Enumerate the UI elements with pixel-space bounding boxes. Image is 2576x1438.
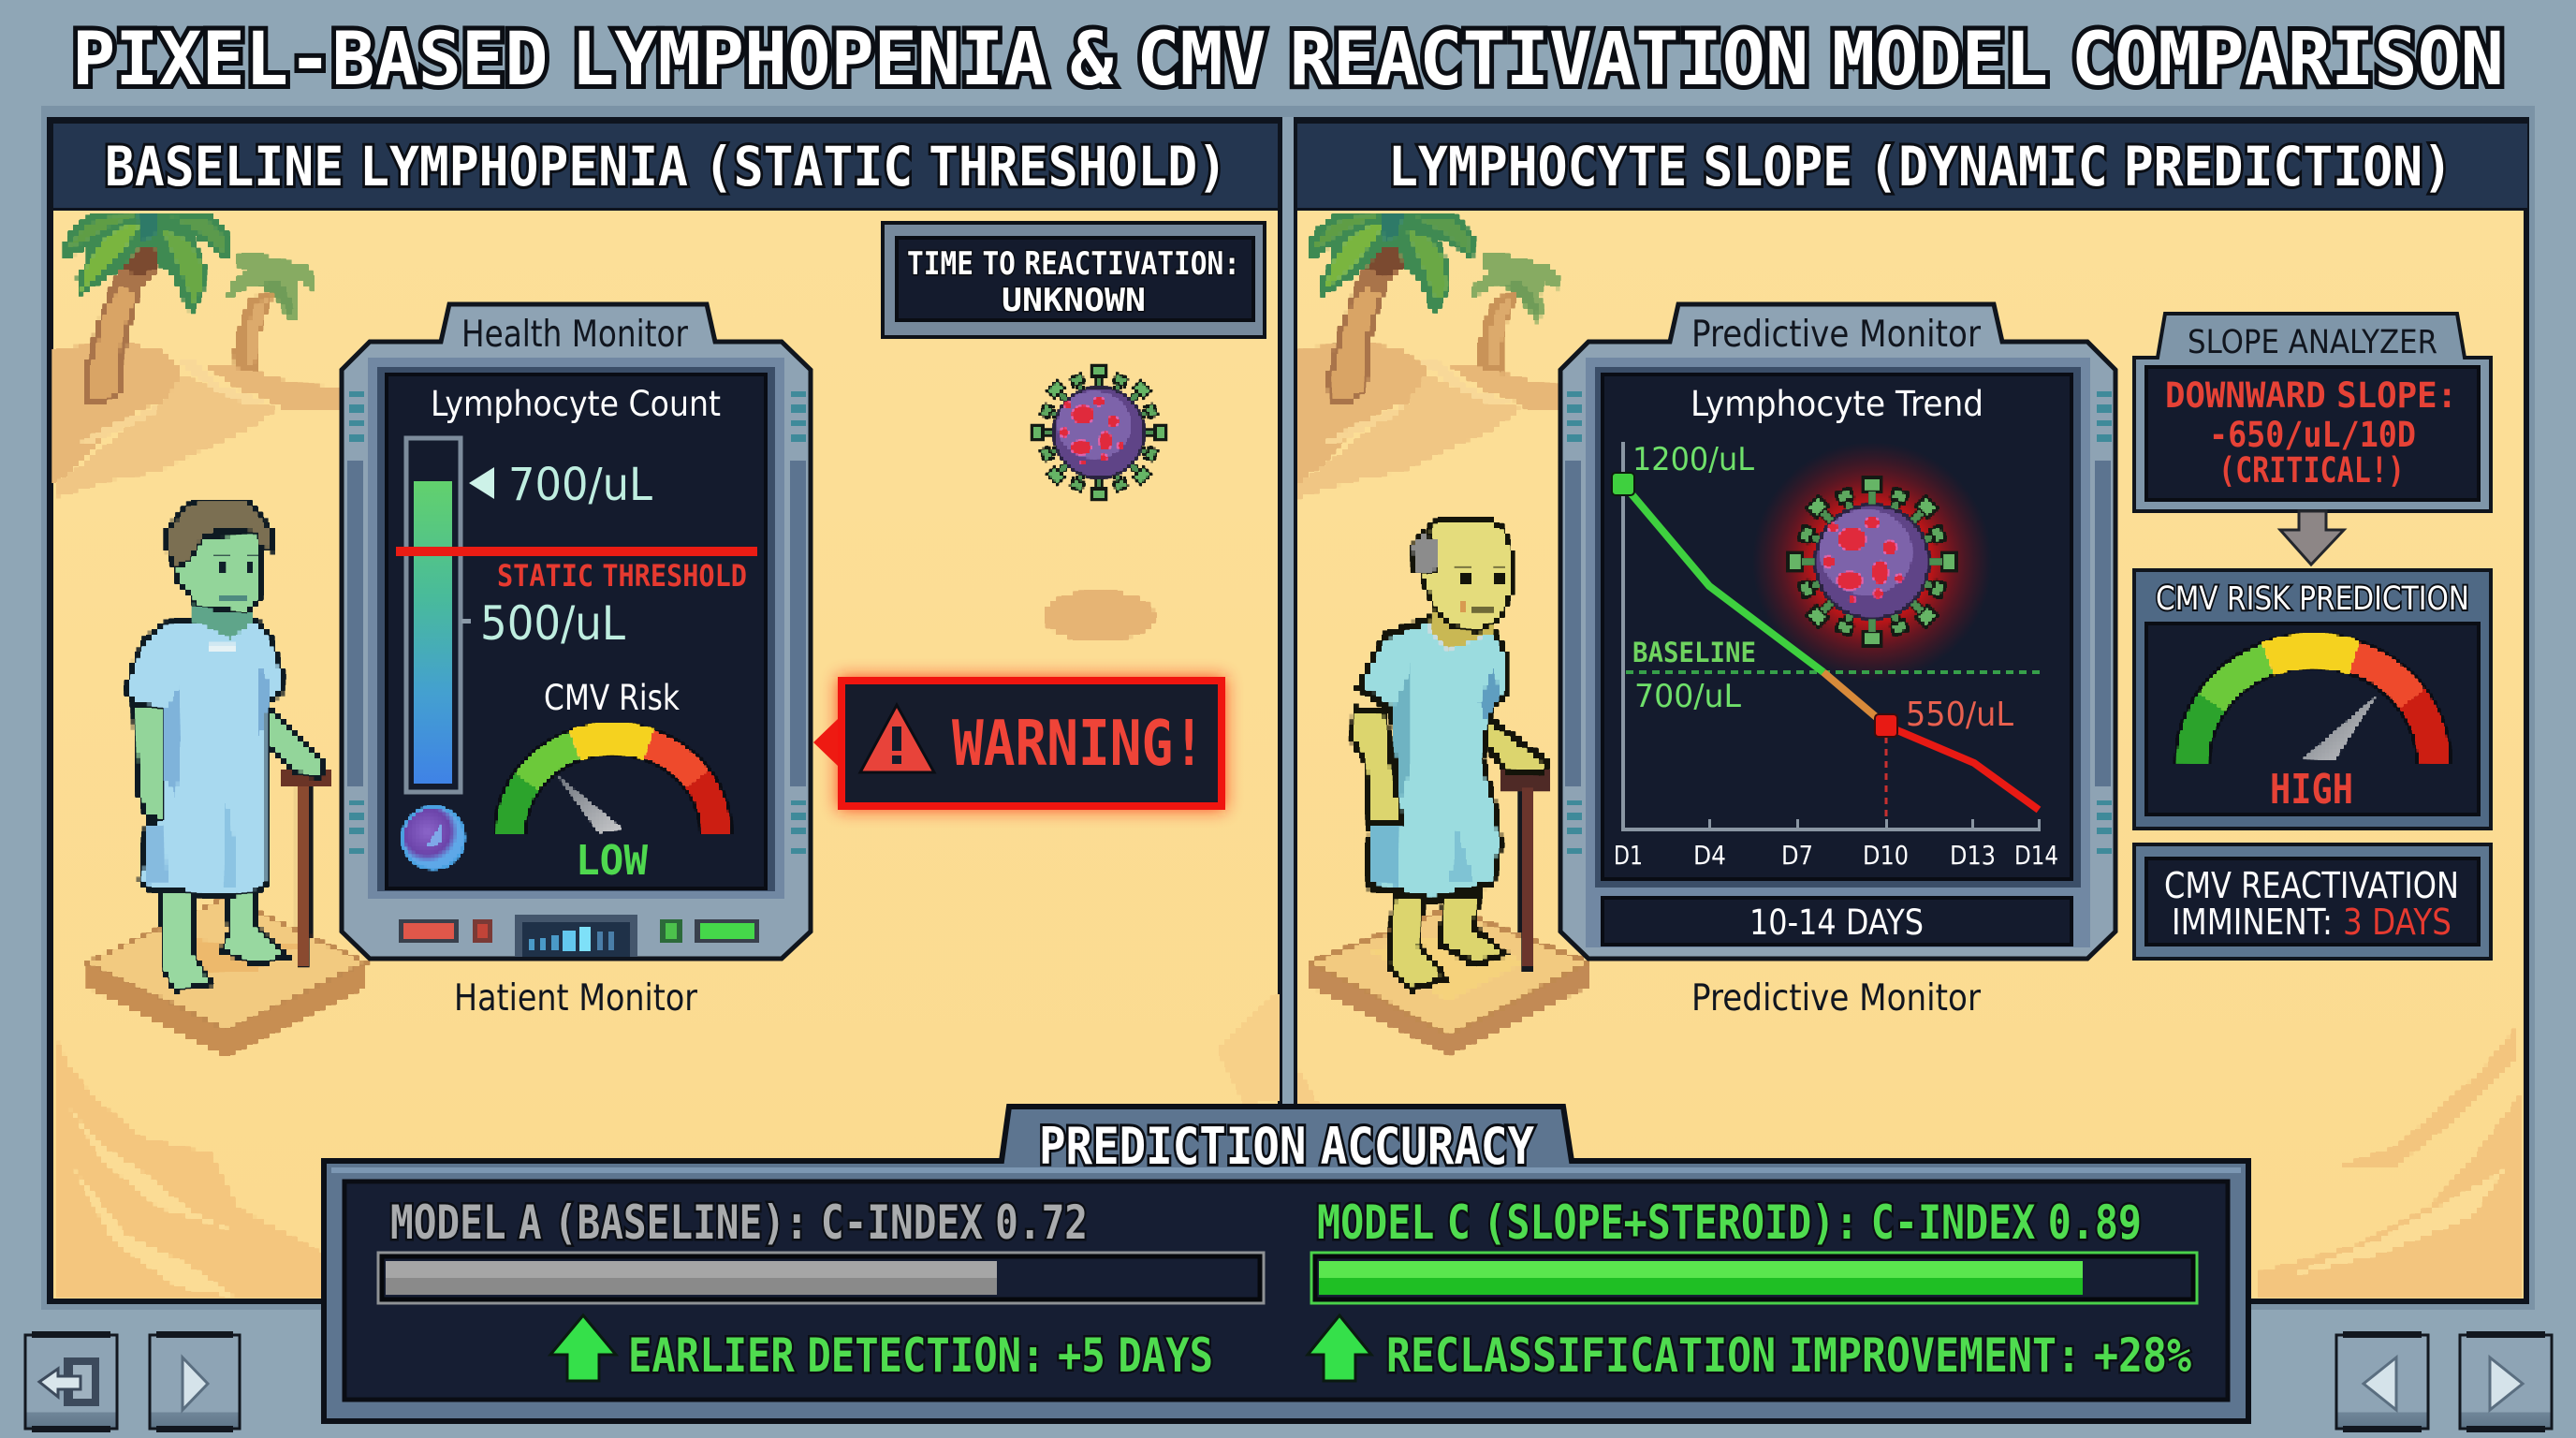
screen bbox=[387, 374, 766, 888]
callout: time to reactivation: TIME TO REACTIVATION: bbox=[907, 245, 1240, 283]
virus with red glow bbox=[1752, 442, 1992, 682]
accuracy casing bbox=[324, 1107, 2248, 1421]
legs and feet bbox=[1388, 894, 1505, 990]
gown bbox=[126, 619, 283, 896]
panel: slope analyzer: DOWNWARD SLOPE: bbox=[2165, 375, 2457, 416]
red point bbox=[1875, 714, 1897, 737]
chart value labels: BASELINE bbox=[1632, 637, 1756, 668]
panel: slope analyzer: (CRITICAL!) bbox=[2218, 450, 2405, 491]
axes bbox=[1621, 442, 2041, 831]
low label: LOW bbox=[576, 837, 648, 885]
transition line bbox=[1823, 672, 1886, 726]
descending line green bbox=[1623, 484, 1823, 672]
x axis labels: D13 bbox=[1950, 840, 1996, 871]
callout: time to reactivation bbox=[883, 223, 1265, 337]
monitor: predictive monitor bbox=[1560, 304, 2115, 959]
reclassification improvement: RECLASSIFICATION IMPROVEMENT: +28% bbox=[1386, 1328, 2191, 1383]
screen bbox=[1603, 374, 2071, 879]
500 marker: 500/uL bbox=[480, 596, 625, 651]
lymphocyte bar bbox=[406, 438, 461, 792]
screen title: Lymphocyte Count bbox=[431, 384, 721, 424]
grilles bbox=[1567, 391, 2112, 854]
caption: predictive monitor: Predictive Monitor bbox=[1691, 977, 1982, 1020]
chart value labels bbox=[1632, 441, 2013, 734]
gauge low bbox=[510, 739, 716, 833]
tab label: Predictive Monitor bbox=[1691, 314, 1982, 356]
panel: slope analyzer: -650/uL/10D bbox=[2209, 415, 2416, 455]
model a label: MODEL A (BASELINE): C-INDEX 0.72 bbox=[390, 1196, 1088, 1250]
gauge high bbox=[2192, 651, 2434, 763]
left panel header bbox=[53, 124, 1278, 208]
cane bbox=[279, 768, 330, 969]
x axis labels: D10 bbox=[1863, 840, 1909, 871]
model a bar bbox=[379, 1254, 1263, 1302]
arrow: slope to risk bbox=[2280, 511, 2344, 565]
duration strip: 10-14 DAYS bbox=[1749, 902, 1924, 943]
callout: reactivation imminent: IMMINENT: bbox=[2172, 902, 2333, 943]
static threshold bbox=[396, 547, 757, 594]
arms bbox=[1353, 710, 1547, 827]
x axis labels: D4 bbox=[1693, 840, 1726, 871]
left panel sand scene bbox=[53, 211, 1278, 1299]
x axis labels: D14 bbox=[2014, 840, 2058, 871]
arms bbox=[134, 705, 325, 821]
x axis labels: D7 bbox=[1781, 840, 1813, 871]
earlier detection: EARLIER DETECTION: +5 DAYS bbox=[628, 1328, 1213, 1383]
gown bbox=[1359, 620, 1505, 900]
model c label: MODEL C (SLOPE+STEROID): C-INDEX 0.89 bbox=[1317, 1196, 2142, 1250]
screen title: Lymphocyte Trend bbox=[1690, 384, 1983, 424]
panel: cmv risk prediction: HIGH bbox=[2270, 766, 2353, 814]
accuracy heading: PREDICTION ACCURACY bbox=[1039, 1117, 1534, 1176]
green point bbox=[1612, 473, 1634, 495]
platform bbox=[1310, 908, 1588, 1054]
monitor: health monitor bbox=[342, 304, 811, 959]
callout: warning bbox=[813, 677, 1225, 810]
700 marker: 700/uL bbox=[508, 459, 652, 511]
button: next right bbox=[2460, 1331, 2552, 1432]
x axis labels bbox=[1614, 840, 2058, 871]
button: exit bbox=[25, 1331, 117, 1432]
right panel header bbox=[1297, 124, 2527, 208]
tab label: Health Monitor bbox=[461, 314, 689, 356]
panel: slope analyzer bbox=[2134, 314, 2491, 511]
warning triangle bbox=[860, 705, 934, 772]
cane bbox=[1502, 768, 1551, 970]
head bbox=[167, 501, 271, 652]
icon: cmv virus bbox=[1032, 366, 1165, 499]
monitor casing bbox=[342, 304, 811, 959]
icon: arrow up reclassification bbox=[1308, 1315, 1371, 1381]
button: previous right bbox=[2336, 1331, 2428, 1432]
panel: slope analyzer: SLOPE ANALYZER bbox=[2188, 324, 2437, 361]
callout: warning: WARNING! bbox=[952, 707, 1205, 780]
legs and feet bbox=[162, 888, 287, 990]
chart value labels: 700/uL bbox=[1634, 678, 1741, 715]
icon: arrow up earlier detection bbox=[550, 1315, 616, 1381]
callout: time to reactivation: UNKNOWN bbox=[1002, 282, 1146, 319]
cmv risk label: CMV Risk bbox=[544, 678, 680, 718]
patient with green skin bbox=[87, 501, 365, 1056]
patient with yellow skin bbox=[1310, 519, 1588, 1054]
monitor casing bbox=[1560, 304, 2115, 959]
static threshold: STATIC THRESHOLD bbox=[497, 558, 747, 594]
duration strip bbox=[1603, 898, 2071, 945]
console lights bbox=[399, 915, 759, 957]
right panel sand scene bbox=[1297, 211, 2524, 1299]
callout: reactivation imminent: 3 DAYS bbox=[2343, 902, 2452, 943]
panel: prediction accuracy bbox=[324, 1107, 2248, 1421]
head bbox=[1412, 519, 1512, 651]
dashed drop line bbox=[1885, 737, 1887, 816]
caption: hatient monitor: Hatient Monitor bbox=[454, 977, 698, 1020]
panel: cmv risk prediction: CMV RISK PREDICTION bbox=[2156, 580, 2469, 618]
panel: lymphocyte slope bbox=[1297, 124, 2527, 1299]
chart value labels: 1200/uL bbox=[1632, 441, 1754, 478]
callout: reactivation imminent bbox=[2134, 844, 2491, 959]
callout: reactivation imminent: CMV REACTIVATION bbox=[2164, 865, 2459, 906]
button: next left bbox=[150, 1331, 240, 1432]
baseline dashed bbox=[1626, 670, 2040, 674]
right panel header: LYMPHOCYTE SLOPE (DYNAMIC PREDICTION) bbox=[1388, 135, 2452, 198]
grilles bbox=[349, 391, 806, 854]
left panel header: BASELINE LYMPHOPENIA (STATIC THRESHOLD) bbox=[105, 135, 1227, 198]
title: PIXEL-BASED LYMPHOPENIA & CMV REACTIVATION MODEL COMPARISON bbox=[72, 18, 2504, 102]
descending line red bbox=[1886, 726, 2039, 810]
line chart bbox=[1612, 441, 2058, 871]
x axis labels: D1 bbox=[1614, 840, 1643, 871]
panel: baseline lymphopenia bbox=[53, 124, 1278, 1299]
chart value labels: 550/uL bbox=[1906, 696, 2013, 734]
platform bbox=[87, 898, 365, 1056]
virus shadow bbox=[1043, 591, 1155, 641]
cell orb bbox=[402, 807, 464, 869]
panel: cmv risk prediction bbox=[2134, 570, 2491, 829]
model c bar bbox=[1312, 1254, 2196, 1302]
